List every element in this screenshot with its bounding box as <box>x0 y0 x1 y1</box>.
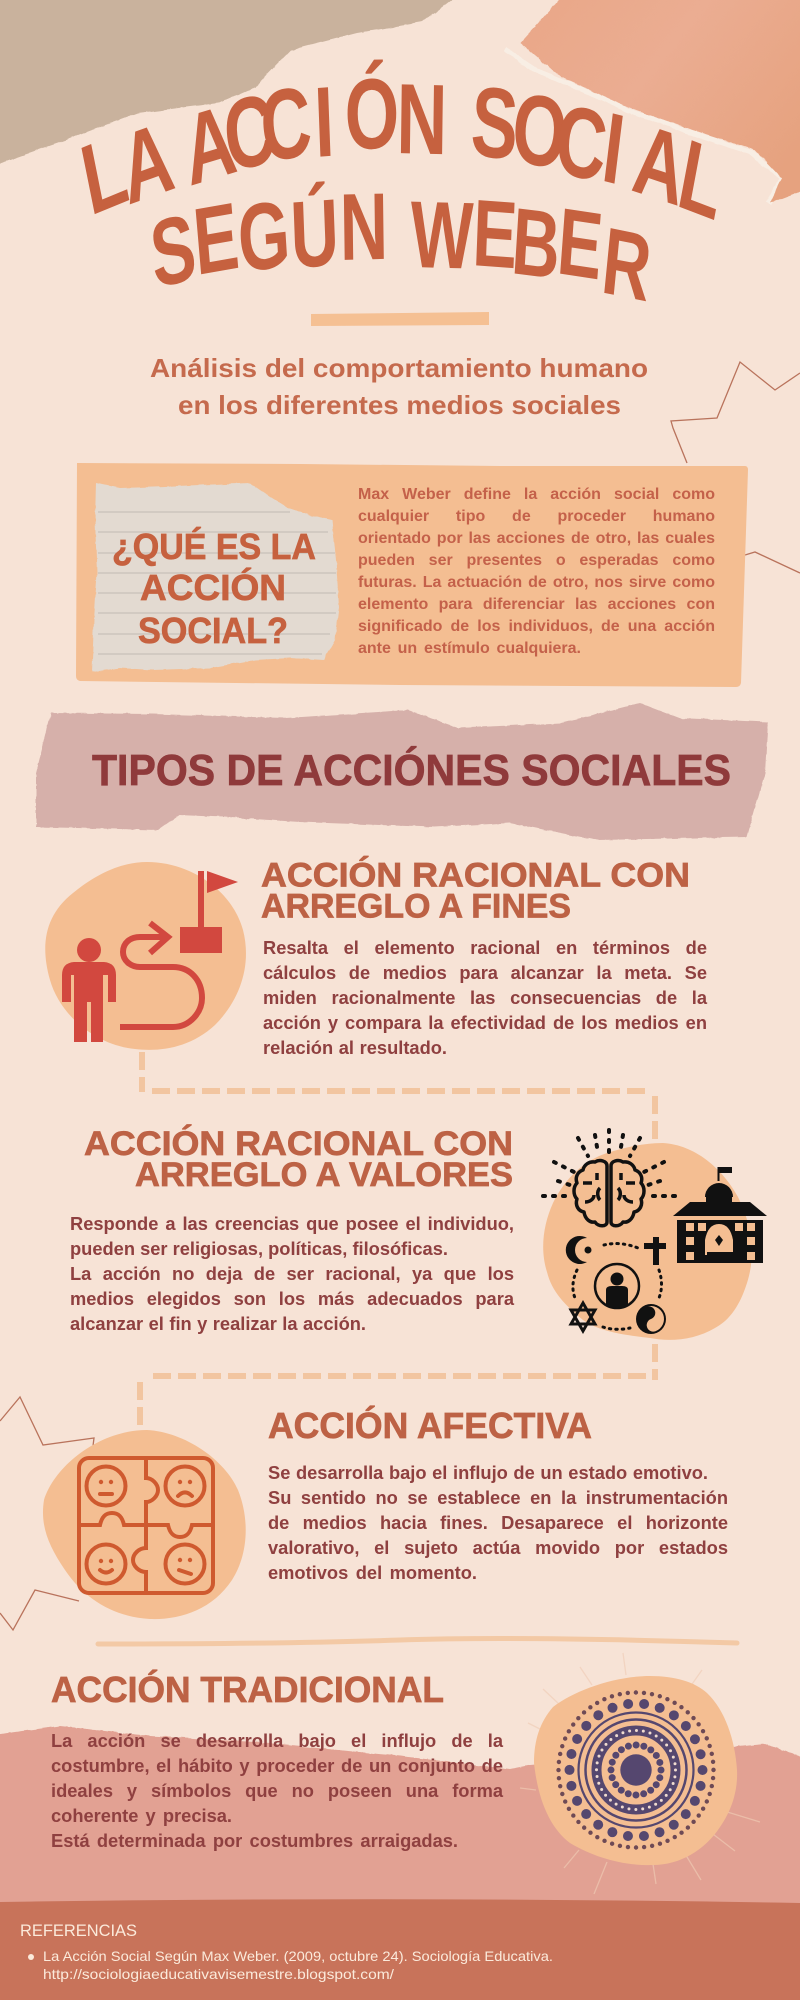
panel paragraph: cualquier tipo de proceder humano <box>358 508 715 525</box>
title: LA ACCIÓN SOCIAL <box>73 57 732 242</box>
panel paragraph: elemento para diferenciar las acciones con <box>358 596 715 613</box>
paragraph: pueden ser religiosas, políticas, filosóficas. <box>70 1238 448 1259</box>
panel heading: ACCIÓN <box>140 566 286 608</box>
panel paragraph <box>358 484 728 664</box>
paragraph: alcanzar el fin y realizar la acción. <box>70 1313 366 1334</box>
subtitle <box>150 353 648 420</box>
heading: ACCIÓN TRADICIONAL <box>51 1668 444 1710</box>
paragraph: Su sentido no se establece en la instrumentación <box>268 1487 728 1508</box>
paragraph: ideales y símbolos que no poseen una forma <box>51 1780 503 1801</box>
title underline bar <box>311 312 489 326</box>
paragraph: La acción no deja de ser racional, ya que los <box>70 1263 514 1284</box>
panel heading: SOCIAL? <box>138 610 288 651</box>
panel paragraph: ante un estímulo cualquiera. <box>358 640 581 657</box>
dashed connector 2 to 3 <box>140 1344 655 1432</box>
paragraph: Resalta el elemento racional en términos de <box>263 937 707 958</box>
title <box>73 57 732 322</box>
panel paragraph: significado de los individuos, de una acción <box>358 618 715 635</box>
paragraph <box>268 1460 748 1590</box>
rose ground band <box>0 1726 800 1915</box>
panel paragraph: Max Weber define la acción social como <box>358 486 715 503</box>
title: SEGÚN WEBER <box>145 174 656 322</box>
banner heading: TIPOS DE ACCIÓNES SOCIALES <box>92 745 731 795</box>
references: REFERENCIAS <box>20 1921 137 1940</box>
paragraph: miden racionalmente las consecuencias de la <box>263 987 707 1008</box>
decorative star outline top right <box>671 362 800 573</box>
building <box>673 1167 767 1263</box>
paragraph: Está determinada por costumbres arraigadas. <box>51 1830 458 1851</box>
banner: types of social actions <box>36 703 768 840</box>
section divider <box>98 1639 737 1644</box>
icon: mandala <box>520 1653 760 1894</box>
icon: person, path and flag <box>45 862 246 1050</box>
heading: ARREGLO A FINES <box>261 888 571 926</box>
religious symbols <box>566 1236 668 1334</box>
subtitle: en los diferentes medios sociales <box>178 390 621 420</box>
paragraph: medios elegidos son los más adecuados para <box>70 1288 514 1309</box>
decorative star outline left <box>0 1397 94 1630</box>
subtitle: Análisis del comportamiento humano <box>150 353 648 383</box>
paragraph: cálculos de medios para alcanzar la meta. Se <box>263 962 707 983</box>
panel: what is social action <box>76 463 748 687</box>
heading: ACCIÓN RACIONAL CON <box>84 1125 513 1163</box>
icon: brain, building and religions <box>543 1130 767 1340</box>
paragraph: La acción se desarrolla bajo el influjo de la <box>51 1730 503 1751</box>
paragraph: valorativo, el sujeto actúa movido por estados <box>268 1537 728 1558</box>
torn kraft paper corner <box>0 0 470 175</box>
section: traditional action <box>51 1653 760 1894</box>
heading: ACCIÓN AFECTIVA <box>268 1404 592 1446</box>
panel paragraph: futuras. La actuación de otro, nos sirve como <box>358 574 715 591</box>
paragraph: emotivos del momento. <box>268 1562 477 1583</box>
dashed connector 1 to 2 <box>142 1052 655 1142</box>
paragraph: Responde a las creencias que posee el individuo, <box>70 1213 514 1234</box>
heading <box>261 856 690 926</box>
paragraph: relación al resultado. <box>263 1037 447 1058</box>
references: http://sociologiaeducativavisemestre.blogspot.com/ <box>43 1966 394 1982</box>
torn notebook paper <box>92 483 339 672</box>
heading <box>84 1125 513 1194</box>
heading: ARREGLO A VALORES <box>135 1156 513 1194</box>
references: La Acción Social Según Max Weber. (2009, octubre 24). Sociología Educativa. <box>43 1948 553 1964</box>
paragraph: coherente y precisa. <box>51 1805 232 1826</box>
references <box>20 1921 553 1982</box>
torn watercolor corner <box>505 0 800 203</box>
panel heading: ¿QUÉ ES LA <box>112 526 316 567</box>
paragraph <box>70 1211 530 1341</box>
paragraph: costumbre, el hábito y proceder de un conjunto de <box>51 1755 503 1776</box>
panel heading <box>112 526 316 651</box>
section: rational action toward values <box>70 1125 767 1341</box>
paragraph: Se desarrolla bajo el influjo de un estado emotivo. <box>268 1462 708 1483</box>
panel paragraph: orientado por las acciones de otro, las cuales <box>358 530 715 547</box>
panel paragraph: pueden ser presentes o esperadas como <box>358 552 715 569</box>
section: affective action <box>43 1404 748 1619</box>
paragraph: de medios hacia fines. Desaparece el horizonte <box>268 1512 728 1533</box>
footer band <box>0 1899 800 2000</box>
paragraph: acción y compara la efectividad de los medios en <box>263 1012 707 1033</box>
icon: emotion puzzle <box>43 1430 246 1619</box>
paragraph <box>263 935 723 1065</box>
section: rational action toward ends <box>45 856 723 1065</box>
heading: ACCIÓN RACIONAL CON <box>261 856 690 894</box>
paragraph <box>51 1728 521 1858</box>
